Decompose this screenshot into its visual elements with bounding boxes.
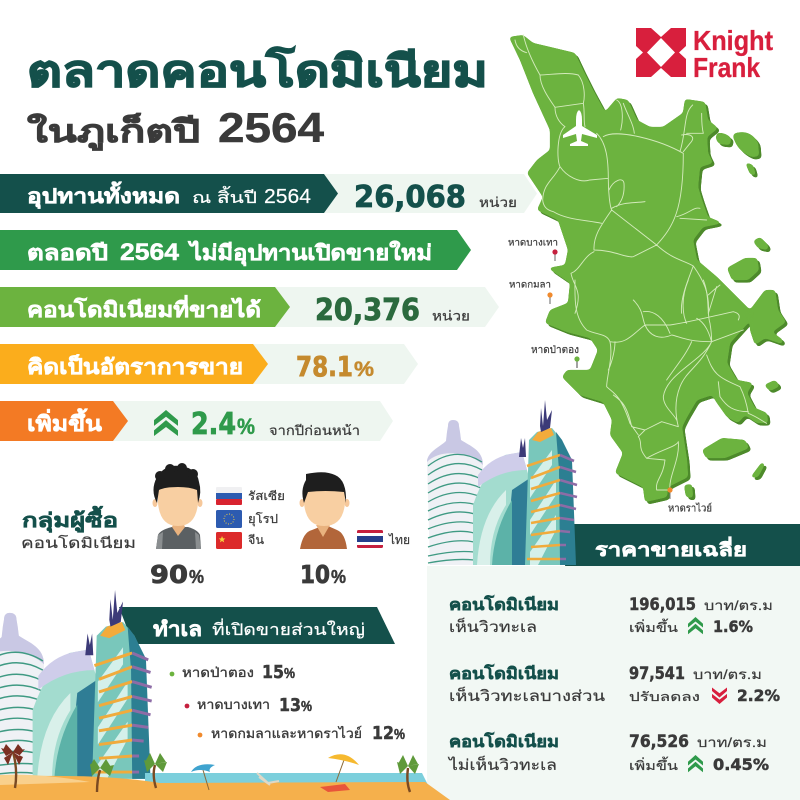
panel: units sold: หน่วย (432, 308, 470, 324)
price row: no sea view: 0.45% (713, 755, 769, 774)
list: beach shares: % (301, 698, 312, 715)
labels: foreign buyers: รัสเซีย (248, 489, 285, 503)
price row: sea view: เห็นวิวทะเล (449, 617, 537, 636)
panel: increase: จากปีก่อนหน้า (269, 423, 360, 438)
heading: buyers: คอนโดมิเนียม (21, 534, 136, 552)
heading: buyers (21, 505, 136, 552)
share 90 percent: % (189, 567, 204, 587)
logo: Knight Frank: Frank (693, 52, 760, 83)
flags: foreign buyers (216, 487, 242, 549)
panel: sales rate: % (354, 358, 374, 381)
flag: thailand (357, 530, 383, 548)
beach umbrellas and lounge (191, 754, 359, 792)
panel: sales rate: 78.1 (296, 350, 353, 383)
price row: sea view: 1.6% (713, 617, 753, 636)
icon: foreign buyer (152, 463, 202, 549)
panel: average price (427, 400, 800, 800)
panel: total supply: 26,068 (354, 180, 466, 215)
panel: increase (0, 401, 393, 442)
labels: foreign buyers: ยุโรป (248, 512, 278, 527)
price row: no sea view: บาท/ตร.ม (697, 735, 767, 750)
palm trees (1, 744, 419, 792)
panel: total supply: 2564 (264, 186, 311, 208)
heading: buyers: กลุ่มผู้ซื้อ (22, 505, 118, 534)
price row: partial sea view: 2.2% (737, 686, 780, 705)
panel: sales rate (0, 344, 418, 384)
price row: partial sea view: ปรับลดลง (629, 690, 700, 704)
price row: sea view: บาท/ตร.ม (704, 598, 773, 613)
share 10 percent: 10 (300, 560, 330, 589)
panel: total supply: หน่วย (479, 195, 517, 210)
panel: total supply (0, 174, 537, 215)
panel: no new supply: ตลอดปี (27, 241, 108, 265)
panel: no new supply: ไม่มีอุปทานเปิดขายใหม่ (188, 240, 432, 267)
icon: up chevrons (154, 410, 178, 436)
list: beach shares: หาดบางเทา (197, 697, 270, 712)
price row: partial sea view: คอนโดมิเนียม (449, 663, 559, 683)
banner: beach locations: ที่เปิดขายส่วนใหญ่ (212, 618, 365, 639)
labels: foreign buyers: จีน (248, 533, 264, 547)
price row: partial sea view (449, 663, 780, 705)
subtitle (27, 104, 325, 151)
icon: airplane (563, 110, 597, 146)
panel: sales rate: คิดเป็นอัตราการขาย (27, 353, 243, 379)
towers illustration lower (0, 590, 152, 779)
list: beach shares: หาดกมลาและหาดราไวย์ (211, 725, 362, 741)
list: beach shares (170, 662, 405, 744)
map pins (547, 249, 673, 499)
price row: partial sea view: เห็นวิวทะเลบางส่วน (449, 686, 605, 705)
map labels: หาดกมลา (509, 280, 551, 290)
price row: no sea view: เพิ่มขึ้น (629, 756, 679, 773)
subtitle: 2564 (218, 104, 325, 151)
list: beach shares: หาดป่าตอง (182, 665, 254, 680)
price row: partial sea view: 97,541 (629, 664, 685, 684)
map labels: หาดบางเทา (508, 238, 558, 248)
subtitle: ในภูเก็ตปี (27, 112, 200, 151)
panel: total supply: อุปทานทั้งหมด (27, 181, 180, 209)
list: beach shares: 15 (262, 662, 284, 683)
price row: partial sea view: บาท/ตร.ม (693, 667, 762, 682)
map labels (508, 238, 712, 514)
map labels: หาดป่าตอง (531, 345, 579, 356)
panel: no new supply (0, 230, 471, 270)
labels: foreign buyers (248, 489, 285, 547)
label: thailand: ไทย (388, 533, 410, 547)
panel: total supply: ณ สิ้นปี (192, 186, 257, 207)
price row: sea view: คอนโดมิเนียม (449, 594, 559, 614)
price heading: ราคาขายเฉลี่ย (595, 536, 747, 560)
panel: units sold: คอนโดมิเนียมที่ขายได้ (27, 294, 261, 322)
share 10 percent: % (331, 567, 346, 587)
panel: units sold (0, 287, 499, 328)
price row: sea view (449, 594, 773, 636)
price row: no sea view: ไม่เห็นวิวทะเล (448, 755, 557, 774)
banner: beach locations (119, 607, 395, 644)
logo: Knight Frank: Knight (693, 25, 773, 56)
share 90 percent: 90 (150, 560, 188, 589)
panel: units sold: 20,376 (315, 293, 420, 328)
list: beach shares: % (284, 665, 295, 682)
panel: increase: % (237, 414, 255, 439)
share 90 percent (150, 560, 204, 589)
icon: thai buyer (300, 472, 350, 549)
map labels: หาดราไวย์ (668, 502, 712, 514)
list: beach shares: % (394, 726, 405, 743)
price row: no sea view (448, 731, 769, 774)
panel: increase: เพิ่มขึ้น (27, 408, 103, 436)
towers illustration upper (427, 400, 577, 565)
logo: Knight Frank (636, 25, 773, 83)
price row: sea view: เพิ่มขึ้น (629, 618, 679, 635)
list: beach shares: 12 (372, 723, 394, 744)
price row: sea view: 196,015 (629, 595, 696, 615)
price row: no sea view: คอนโดมิเนียม (449, 731, 559, 751)
map of Phuket (509, 35, 788, 504)
title: ตลาดคอนโดมิเนียม (27, 45, 488, 96)
panel: no new supply: 2564 (120, 239, 180, 266)
banner: beach locations: ทำเล (153, 619, 202, 641)
price heading (565, 524, 800, 566)
beach illustration (0, 773, 450, 800)
panel: increase: 2.4 (191, 407, 236, 442)
price row: no sea view: 76,526 (629, 732, 689, 752)
list: beach shares: 13 (279, 695, 301, 716)
